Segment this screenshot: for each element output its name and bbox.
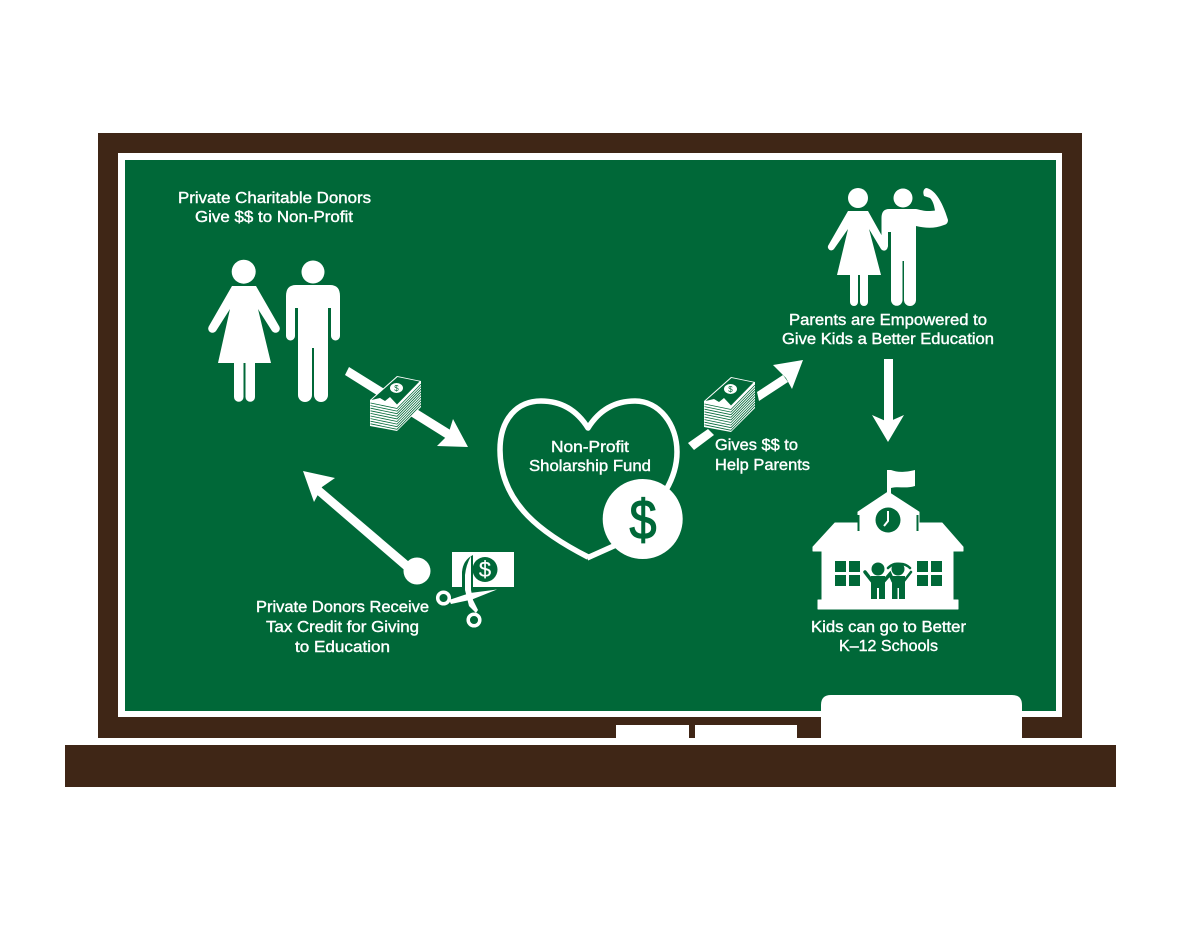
arrow: fund to parents bbox=[688, 360, 803, 450]
scissor rings bbox=[438, 592, 449, 604]
donor man bbox=[286, 260, 340, 402]
schools label: K–12 Schools bbox=[839, 638, 938, 655]
bill bbox=[452, 552, 514, 587]
cut line bbox=[462, 555, 473, 587]
windows bbox=[835, 561, 942, 586]
icon: donor couple bbox=[208, 260, 340, 402]
arrow: donors to non-profit bbox=[345, 367, 468, 447]
chalkboard bbox=[65, 133, 1116, 787]
donors heading: Private Charitable Donors bbox=[178, 190, 371, 207]
chalk stick long bbox=[695, 725, 797, 738]
gives money label: Gives $$ to bbox=[715, 437, 798, 454]
tax credit label: Private Donors Receive bbox=[256, 599, 429, 616]
dollar coin bbox=[603, 479, 683, 559]
donors heading bbox=[178, 190, 371, 226]
fund label bbox=[529, 439, 651, 475]
scissor blades bbox=[465, 556, 478, 613]
heart: non-profit scholarship fund: $ bbox=[630, 488, 656, 551]
tax credit label: Tax Credit for Giving bbox=[266, 619, 419, 636]
arrow: parents to schools bbox=[872, 359, 904, 442]
tax credit label: to Education bbox=[295, 639, 390, 656]
icon: money stack left: $ bbox=[394, 384, 399, 393]
parents label: Parents are Empowered to bbox=[789, 312, 987, 329]
parents label: Give Kids a Better Education bbox=[782, 331, 994, 348]
icon: scissors cutting bill bbox=[438, 552, 514, 626]
arrow: tax credit back to donors bbox=[303, 471, 430, 584]
kids bbox=[865, 562, 911, 599]
tower gaps bbox=[858, 515, 918, 531]
building bbox=[813, 492, 963, 609]
schools label: Kids can go to Better bbox=[811, 619, 967, 636]
chalk stick short bbox=[616, 725, 689, 738]
schools label bbox=[811, 619, 967, 655]
icon: scissors cutting bill: $ bbox=[479, 557, 491, 582]
white board border bbox=[118, 153, 1062, 717]
parent woman bbox=[828, 188, 888, 306]
donors heading: Give $$ to Non-Profit bbox=[195, 209, 354, 226]
icon: empowered parents bbox=[828, 188, 948, 306]
parent man flexing bbox=[882, 188, 948, 306]
heart: non-profit scholarship fund bbox=[500, 401, 683, 559]
flag bbox=[887, 470, 915, 497]
fund label: Non-Profit bbox=[551, 439, 630, 456]
gives money label bbox=[715, 437, 810, 474]
eraser bbox=[821, 695, 1022, 738]
wooden frame bbox=[98, 133, 1082, 738]
chalk tray bbox=[65, 745, 1116, 787]
tax credit label bbox=[256, 599, 429, 656]
gives money label: Help Parents bbox=[715, 457, 810, 474]
icon: money stack right bbox=[704, 377, 755, 432]
icon: money stack right: $ bbox=[728, 385, 733, 394]
donor woman bbox=[208, 260, 280, 402]
clock bbox=[876, 508, 900, 532]
dollar seal bbox=[472, 557, 498, 582]
fund label: Sholarship Fund bbox=[529, 458, 651, 475]
icon: schoolhouse bbox=[813, 470, 963, 609]
icon: money stack left bbox=[370, 376, 421, 431]
parents label bbox=[782, 312, 994, 348]
green board surface bbox=[125, 160, 1056, 711]
